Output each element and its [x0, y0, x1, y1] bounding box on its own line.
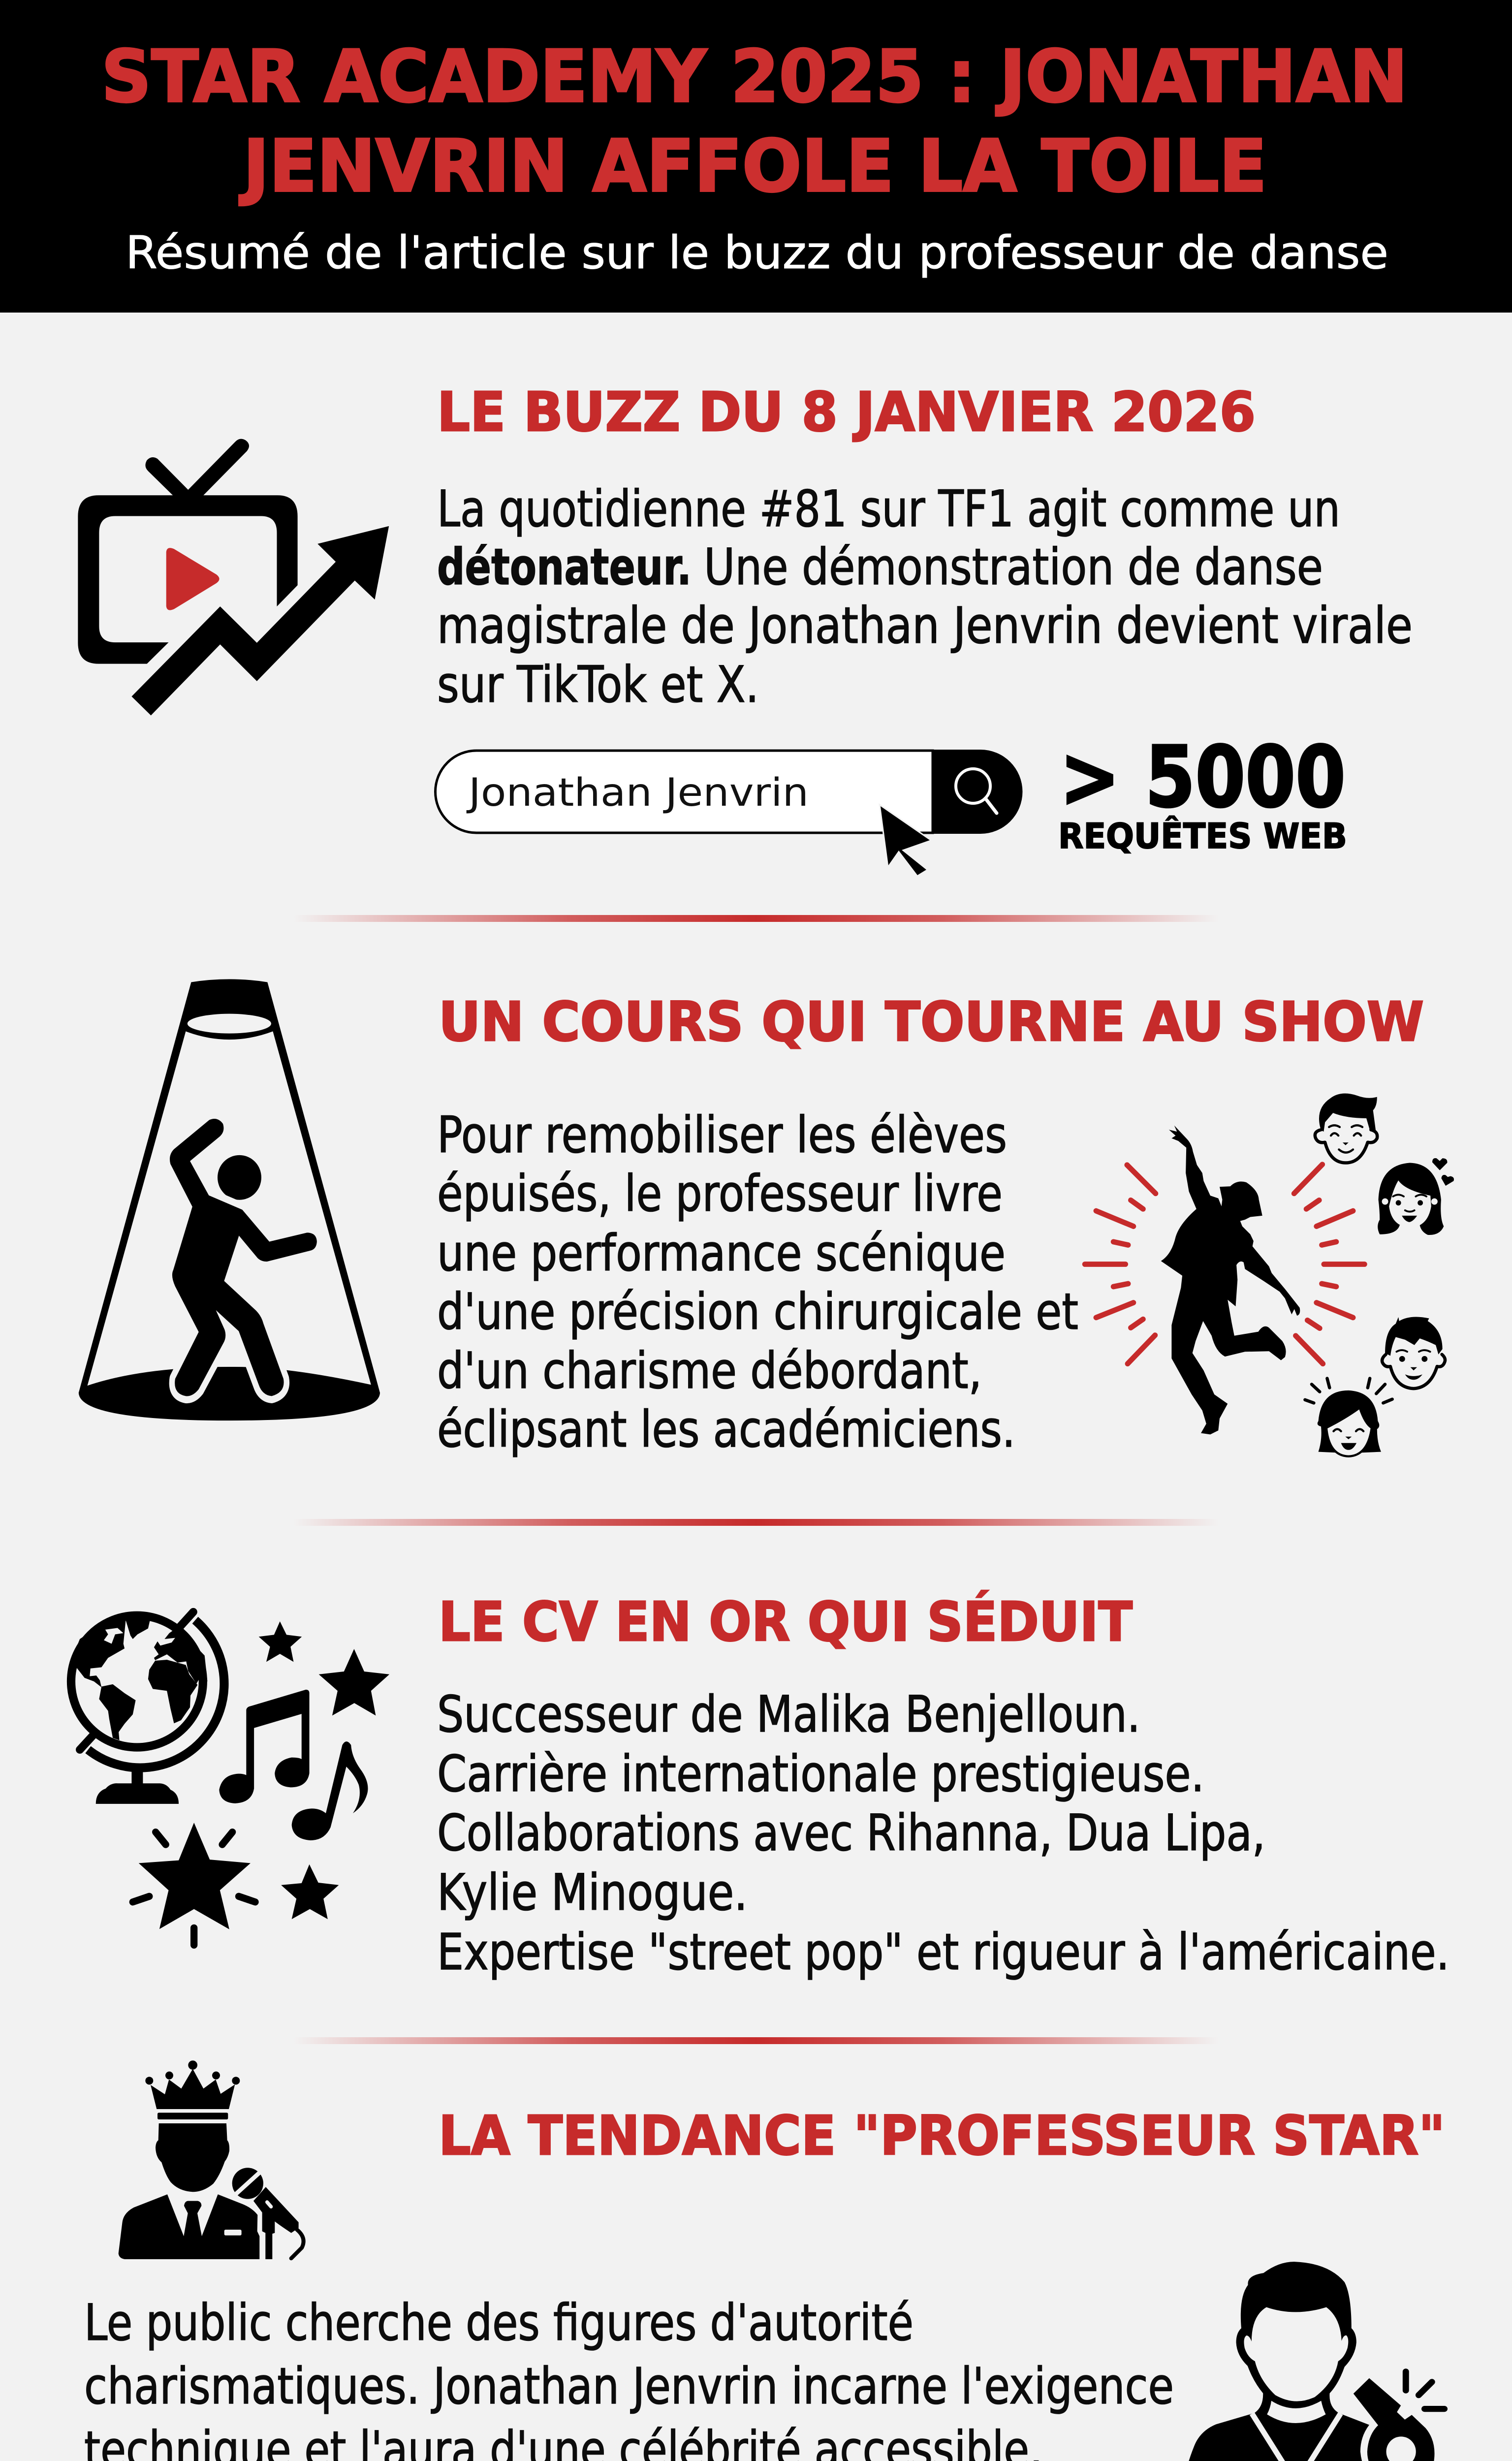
body text: détonateur. — [437, 538, 692, 597]
body text — [437, 1685, 1449, 1982]
face: excited girl — [1305, 1379, 1392, 1456]
body text: d'un charisme débordant, — [437, 1342, 982, 1400]
panel: la tendance professeur star — [84, 2060, 1445, 2461]
body text — [84, 2294, 1174, 2461]
body text: éclipsant les académiciens. — [437, 1400, 1015, 1459]
body text: Collaborations avec Rihanna, Dua Lipa, — [437, 1804, 1265, 1862]
body text: d'une précision chirurgicale et — [437, 1283, 1078, 1341]
body text: sur TikTok et X. — [437, 656, 759, 714]
icon: globe, music notes and stars — [70, 1612, 389, 1945]
body text: Successeur de Malika Benjelloun. — [437, 1685, 1140, 1744]
face: smiling boy — [1315, 1094, 1377, 1163]
red energy rays — [1085, 1165, 1364, 1364]
stat: more than 5000 web requests: > 5000 — [1060, 728, 1346, 826]
panel: le cv en or qui seduit — [70, 1590, 1449, 1982]
body text: une performance scénique — [437, 1224, 1006, 1283]
globe — [70, 1612, 224, 1804]
body text: épuisés, le professeur livre — [437, 1165, 1003, 1223]
body text: La quotidienne #81 sur TF1 agit comme un — [437, 480, 1340, 538]
stat: more than 5000 web requests — [1058, 728, 1347, 856]
title — [101, 35, 1408, 208]
whistle — [1354, 2371, 1445, 2461]
search bar: Jonathan Jenvrin — [466, 771, 809, 815]
stars — [133, 1621, 389, 1945]
icon: crowned man with microphone — [119, 2060, 304, 2259]
icon: tv with rising arrow — [78, 439, 389, 716]
panel: le buzz du 8 janvier 2026 — [78, 380, 1413, 875]
search bar — [435, 750, 1023, 834]
microphone — [232, 2168, 304, 2259]
heading: UN COURS QUI TOURNE AU SHOW — [439, 990, 1424, 1053]
heading: LE BUZZ DU 8 JANVIER 2026 — [437, 380, 1256, 443]
stat: more than 5000 web requests: REQUÊTES WEB — [1058, 816, 1347, 856]
icon: dancer under spotlight — [79, 979, 380, 1420]
heading: LE CV EN OR QUI SÉDUIT — [439, 1590, 1133, 1653]
body text: Kylie Minogue. — [437, 1863, 748, 1922]
body text: Le public cherche des figures d'autorité — [84, 2294, 914, 2352]
body text: Carrière internationale prestigieuse. — [437, 1745, 1204, 1803]
icon: cursor — [881, 806, 930, 875]
body text — [437, 1106, 1078, 1459]
subtitle: Résumé de l'article sur le buzz du professeur de danse — [126, 226, 1388, 279]
music notes — [219, 1690, 368, 1840]
heading: LA TENDANCE "PROFESSEUR STAR" — [439, 2104, 1445, 2167]
face: boy with fringe — [1382, 1317, 1445, 1388]
icon: coach with whistle — [1182, 2262, 1445, 2461]
header banner — [0, 0, 1512, 313]
body text — [437, 480, 1413, 714]
title: STAR ACADEMY 2025 : JONATHAN — [101, 35, 1408, 119]
body text: charismatiques. Jonathan Jenvrin incarne l'exigence — [84, 2357, 1174, 2416]
title: JENVRIN AFFOLE LA TOILE — [239, 125, 1267, 208]
body text: Pour remobiliser les élèves — [437, 1106, 1007, 1165]
face: girl with hearts — [1378, 1158, 1454, 1235]
panel: un cours qui tourne au show — [79, 979, 1454, 1459]
body text: Une démonstration de danse — [704, 538, 1323, 597]
illustration: jumping dancer with audience faces — [1085, 1094, 1454, 1456]
dancer silhouette — [1161, 1126, 1300, 1434]
